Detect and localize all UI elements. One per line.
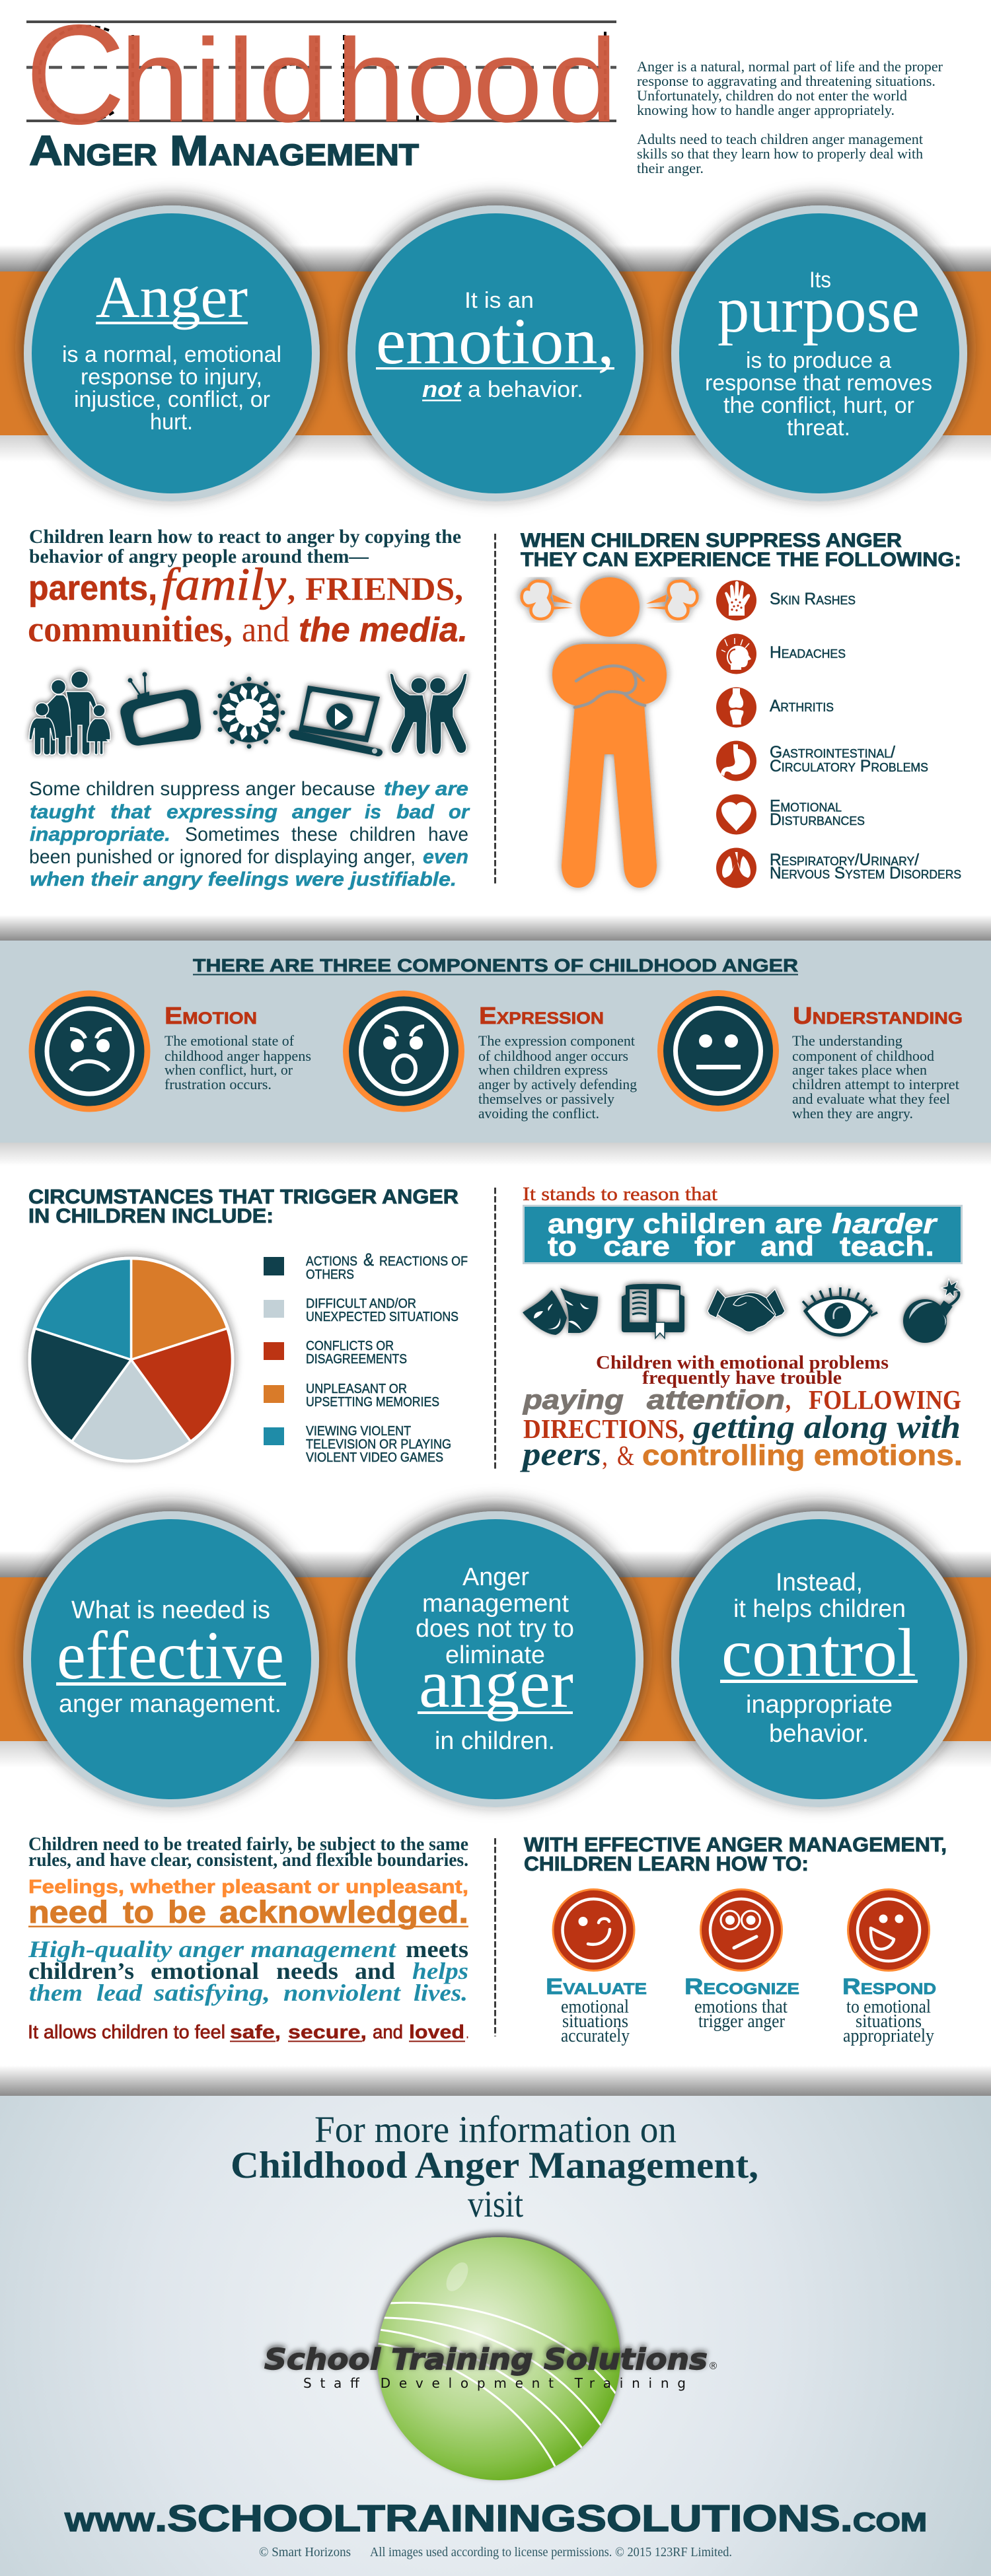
icon: cheering friends [390,673,467,754]
text: safe secure loved: loved [409,2022,464,2043]
circle: emotion [348,205,643,501]
text: trouble areas: & [617,1441,634,1472]
role models list: communities, [28,609,233,650]
component: expression: The expression component [478,1032,635,1049]
component: expression: themselves or passively [478,1091,614,1107]
skill: evaluate: Evaluate [546,1974,647,1999]
heading: with effective management: CHILDREN LEARN HOW TO: [524,1852,809,1875]
legend: ACTIONS [306,1254,357,1269]
icon: theatre masks [523,1288,598,1335]
text: high-quality management: them [29,1980,83,2006]
circle: purpose: threat. [787,415,850,441]
text: safe secure loved: and [373,2022,403,2043]
circle: control: behavior. [769,1720,869,1748]
callout box: harder to care for: care [603,1231,670,1262]
legend: TELEVISION OR PLAYING [306,1437,451,1452]
circle: anger in children: management [422,1590,569,1618]
circle: purpose [671,205,967,501]
paragraph: why children suppress anger: have [428,824,468,845]
text: feelings acknowledged [28,1877,468,1929]
legend: DIFFICULT AND/OR [306,1297,416,1311]
title block [25,0,618,154]
heading: circumstances [28,1185,459,1227]
text: trouble areas: DIRECTIONS, [523,1413,684,1444]
icon: handshake [708,1289,785,1332]
logo wordmark: ® [708,2360,718,2372]
skill: recognize: trigger anger [698,2011,786,2032]
component: emotion [165,1002,311,1092]
skill: recognize [684,1889,799,2032]
icon: bomb [903,1279,960,1343]
intro text [637,58,943,176]
icon: shouting face [343,991,464,1112]
circle: effective: effective [57,1618,284,1694]
text: trouble areas: controlling emotions. [642,1439,963,1472]
paragraph: why children suppress anger: taught [30,801,96,823]
paragraph: why children suppress anger: they are [384,778,468,800]
lead-in text: It stands to reason that [523,1184,717,1205]
paragraph: why children suppress anger: expressing [166,801,277,823]
role models list: parents, [28,569,157,608]
text: safe secure loved: It allows children to feel [28,2022,225,2043]
text: high-quality management: children’s [28,1958,134,1984]
symptom: skin rashes: Skin Rashes [770,590,856,608]
circle: control: it helps children [733,1595,906,1623]
intro text: their anger. [637,160,704,176]
skill: evaluate: emotional [561,1997,629,2017]
legend: DISAGREEMENTS [306,1352,407,1367]
intro text: skills so that they learn how to properly deal with [637,145,923,162]
text: high-quality management: meets [406,1936,468,1962]
logo sphere [377,2237,620,2480]
role models list [28,559,468,650]
intro text: Adults need to teach children anger management [637,131,923,147]
intro text: Anger is a natural, normal part of life and the proper [637,58,943,75]
symptom: respiratory: Nervous System Disorders [770,864,961,882]
symptom: emotional disturbances: Emotional [770,797,842,815]
text: trouble areas [520,1384,963,1472]
circle: purpose: is to produce a [746,348,891,373]
role models list: family [161,559,287,610]
paragraph: why children suppress anger: that [110,801,152,823]
symptom: headaches: Headaches [770,643,846,662]
icon: community wreath [213,676,285,749]
text: fair treatment: rules, and have clear, consistent, and flexible boundaries. [28,1849,468,1871]
heading: when children suppress [521,530,961,571]
callout box: harder to care for: for [694,1231,735,1262]
heading: circumstances: IN CHILDREN INCLUDE: [28,1204,274,1227]
text: fair treatment [28,1834,468,1871]
icon: eye [803,1287,877,1335]
component: understanding [792,1002,963,1122]
intro text: knowing how to handle anger appropriately. [637,102,895,118]
panel heading: THERE ARE THREE COMPONENTS OF CHILDHOOD ANGER [193,955,798,976]
text: trouble areas: paying [523,1384,624,1415]
text: children with emotional problems: Children with emotional problems [596,1353,889,1373]
orange band two [0,1551,991,1768]
text: safe secure loved: secure, [288,2022,367,2043]
white section: copying and suppression [0,520,991,915]
callout box: harder to care for: and [760,1231,814,1262]
symptom: respiratory [716,848,961,888]
icon: family [29,671,110,755]
circle: control: inappropriate [746,1691,893,1719]
paragraph: why children suppress anger: anger [292,801,351,823]
text: trouble areas: getting along with [692,1408,961,1445]
callout box: harder to care for: to [548,1231,577,1262]
skill: respond: appropriately [843,2026,934,2046]
symptom: gastrointestinal [716,741,928,781]
symptom: respiratory: Respiratory/Urinary/ [770,851,919,869]
legend [264,1250,468,1465]
circle: Anger definition [24,205,320,501]
circle: effective: anger management. [59,1690,281,1718]
component: understanding: Understanding [793,1002,963,1029]
component: understanding: and evaluate what they feel [792,1091,950,1107]
text: fair treatment: Children need to be treated fairly, be subject to the same [28,1834,468,1855]
text: trouble areas: , [786,1386,791,1415]
legend: OTHERS [306,1268,354,1282]
call to action text: Childhood Anger Management, [231,2145,758,2186]
legend: UNPLEASANT OR [306,1382,407,1396]
orange band one [0,245,991,462]
paragraph: why children suppress anger [29,778,470,890]
text: safe secure loved [28,2022,469,2043]
circle: control: Instead, [776,1569,863,1596]
symptom: headaches [716,634,846,674]
text: children with emotional problems [596,1353,889,1388]
call to action text: For more information on [314,2109,677,2151]
heading: with effective management: WITH EFFECTIVE ANGER MANAGEMENT, [524,1833,947,1856]
callout box: harder to care for [523,1206,962,1263]
text: high-quality management: satisfying, [153,1980,270,2006]
circle: emotion: a behavior. [468,377,583,402]
heading: children learn: Children learn how to react to anger by copying the [29,526,461,548]
skill: recognize: emotions that [694,1997,788,2017]
component: emotion: childhood anger happens [165,1048,311,1064]
paragraph: why children suppress anger: Some children suppress anger because [29,778,375,800]
symptom: skin rashes [716,580,856,621]
symptom: emotional disturbances: Disturbances [770,810,865,829]
circle: emotion: It is an [464,288,534,313]
icon: laptop video [289,686,383,756]
role models list: and [242,610,289,649]
paragraph: why children suppress anger: inappropriate. [30,824,170,845]
circle: control [671,1511,967,1807]
circle: anger in children: in children. [435,1727,555,1755]
component: expression [478,1002,637,1122]
circle: Anger definition: is a normal, emotional [62,342,281,367]
paragraph: why children suppress anger: is [365,801,381,823]
circle: anger in children: anger [419,1646,573,1722]
symptom: emotional disturbances [716,794,865,835]
legend: UPSETTING MEMORIES [306,1395,439,1410]
symptom: arthritis: Arthritis [770,697,834,715]
logo wordmark: School Training Solutions [264,2343,708,2377]
paragraph: why children suppress anger: been punished or ignored for displaying anger, [29,846,416,868]
legend: CONFLICTS OR [306,1339,394,1353]
icon: open book [622,1284,684,1338]
copyright line: © Smart Horizons [259,2545,351,2559]
text: trouble areas: FOLLOWING [809,1384,961,1415]
circle: Anger definition: response to injury, [81,365,262,390]
component: understanding: when they are angry. [792,1105,913,1122]
intro text: Unfortunately, children do not enter the world [637,87,907,104]
heading: circumstances: CIRCUMSTANCES THAT TRIGGER ANGER [28,1185,459,1208]
skill: evaluate [546,1889,647,2046]
component: understanding: children attempt to interpret [792,1076,959,1092]
subtitle: Anger Management [29,127,419,174]
role models list: the media. [299,611,468,649]
heading: when children suppress: WHEN CHILDREN SUPPRESS ANGER [521,530,902,552]
callout box: harder to care for: teach. [840,1231,934,1262]
skill: recognize: Recognize [684,1974,799,1999]
legend: UNEXPECTED SITUATIONS [306,1310,459,1324]
callout box: harder to care for: harder [832,1208,938,1239]
heading: children learn [29,526,461,567]
legend: VIEWING VIOLENT [306,1424,411,1439]
skill: respond: to emotional [846,1997,931,2017]
circle: anger in children: Anger [462,1563,529,1591]
component: expression: Expression [479,1002,604,1029]
text: safe secure loved: safe, [230,2022,281,2043]
symptom: gastrointestinal: Circulatory Problems [770,757,928,775]
text: high-quality management: helps [412,1958,468,1984]
circle: anger in children [348,1511,643,1807]
symptom: gastrointestinal: Gastrointestinal/ [770,743,895,762]
title word: hildhood [120,15,618,147]
component: expression: when children express [478,1061,608,1078]
callout box: harder to care for: angry children are [548,1208,823,1239]
skill: respond: Respond [842,1974,936,1999]
circle: anger in children: eliminate [445,1641,545,1669]
call to action text: visit [468,2184,523,2225]
legend: & [363,1250,374,1270]
circle: effective: What is needed is [71,1596,270,1624]
footer panel [0,2065,991,2576]
text: children with emotional problems: frequently have trouble [642,1368,842,1388]
text: feelings acknowledged: to [123,1894,154,1929]
component: understanding: anger takes place when [792,1061,927,1078]
paragraph: why children suppress anger: children [349,824,416,845]
circle: Anger definition: Anger [96,265,248,330]
symptom: arthritis [716,687,834,728]
circle: Anger definition: hurt. [150,410,193,435]
component: emotion: The emotional state of [165,1032,295,1049]
component: emotion: frustration occurs. [165,1076,272,1092]
paragraph: why children suppress anger: even [423,846,468,868]
icon: right steam puff [646,581,697,619]
text: high-quality management: lead [96,1980,143,2006]
intro text: response to aggravating and threatening situations. [637,73,936,89]
text: high-quality management: nonviolent [283,1980,401,2006]
text: feelings acknowledged: need [28,1894,108,1929]
text: high-quality management: emotional [151,1958,259,1984]
circle: Anger definition: injustice, conflict, or [74,387,270,412]
circle: purpose: Its [809,268,831,293]
text: high-quality management: needs [276,1958,338,1984]
skill: respond: situations [856,2011,922,2032]
icon: angry face [29,991,151,1112]
component: understanding: The understanding [792,1032,902,1049]
copyright line: All images used according to license permissions. © 2015 123RF Limited. [370,2545,732,2559]
website url: www.SCHOOLTRAININGSOLUTIONS.com [65,2497,927,2540]
pie chart [28,1256,234,1462]
paragraph: why children suppress anger: these [291,824,338,845]
component: emotion: when conflict, hurt, or [165,1061,293,1078]
text: trouble areas: , [602,1441,608,1471]
text: safe secure loved: . [466,2022,469,2043]
circle: emotion: not [422,377,462,402]
role models list: FRIENDS, [305,570,463,607]
skill: evaluate: situations [562,2011,628,2032]
paragraph: why children suppress anger: or [449,801,470,823]
logo wordmark [264,2343,718,2391]
component: expression: of childhood anger occurs [478,1048,628,1064]
icon: television [120,672,201,746]
icon: neutral face [657,990,779,1112]
circle: purpose: purpose [717,273,920,346]
legend: REACTIONS OF [379,1254,468,1269]
text: high-quality management [28,1936,468,2006]
legend: VIOLENT VIDEO GAMES [306,1450,443,1465]
paragraph: why children suppress anger: bad [396,801,435,823]
heading: with effective management [524,1833,947,1875]
circle: purpose: response that removes [705,371,932,396]
text: trouble areas: peers [520,1435,601,1472]
component: emotion: Emotion [165,1002,257,1029]
skill: evaluate: accurately [561,2026,630,2046]
paragraph: why children suppress anger: Sometimes [185,824,279,845]
component: understanding: component of childhood [792,1048,934,1064]
heading: when children suppress: THEY CAN EXPERIENCE THE FOLLOWING: [521,549,961,571]
skill: respond [842,1889,936,2046]
logo wordmark: Staff Development Training [303,2375,686,2391]
figure: angry person [522,577,697,888]
text: high-quality management: High-quality anger management [28,1936,396,1962]
paragraph: why children suppress anger: when their angry feelings were justifiable. [30,869,457,890]
white section: effective management [0,1827,991,2065]
circle: anger in children: does not try to [416,1615,574,1643]
circle: effective [23,1511,319,1807]
component: expression: anger by actively defending [478,1076,637,1092]
text: feelings acknowledged: be [168,1894,206,1929]
role models list: , [287,572,295,607]
circle: emotion: emotion, [376,304,614,378]
text: feelings acknowledged: acknowledged. [219,1894,468,1929]
circle: purpose: the conflict, hurt, or [723,393,914,418]
component: expression: avoiding the conflict. [478,1105,599,1122]
call to action text [231,2109,758,2225]
heading: children learn: behavior of angry people around them— [29,546,369,567]
icon: left steam puff [522,581,573,619]
panel: three components [0,915,991,1166]
text: high-quality management: lives. [414,1980,468,2006]
text: high-quality management: and [355,1958,395,1984]
circle: control: control [721,1615,916,1691]
text: trouble areas: attention [647,1384,785,1415]
text: feelings acknowledged: Feelings, whether pleasant or unpleasant, [28,1877,468,1898]
